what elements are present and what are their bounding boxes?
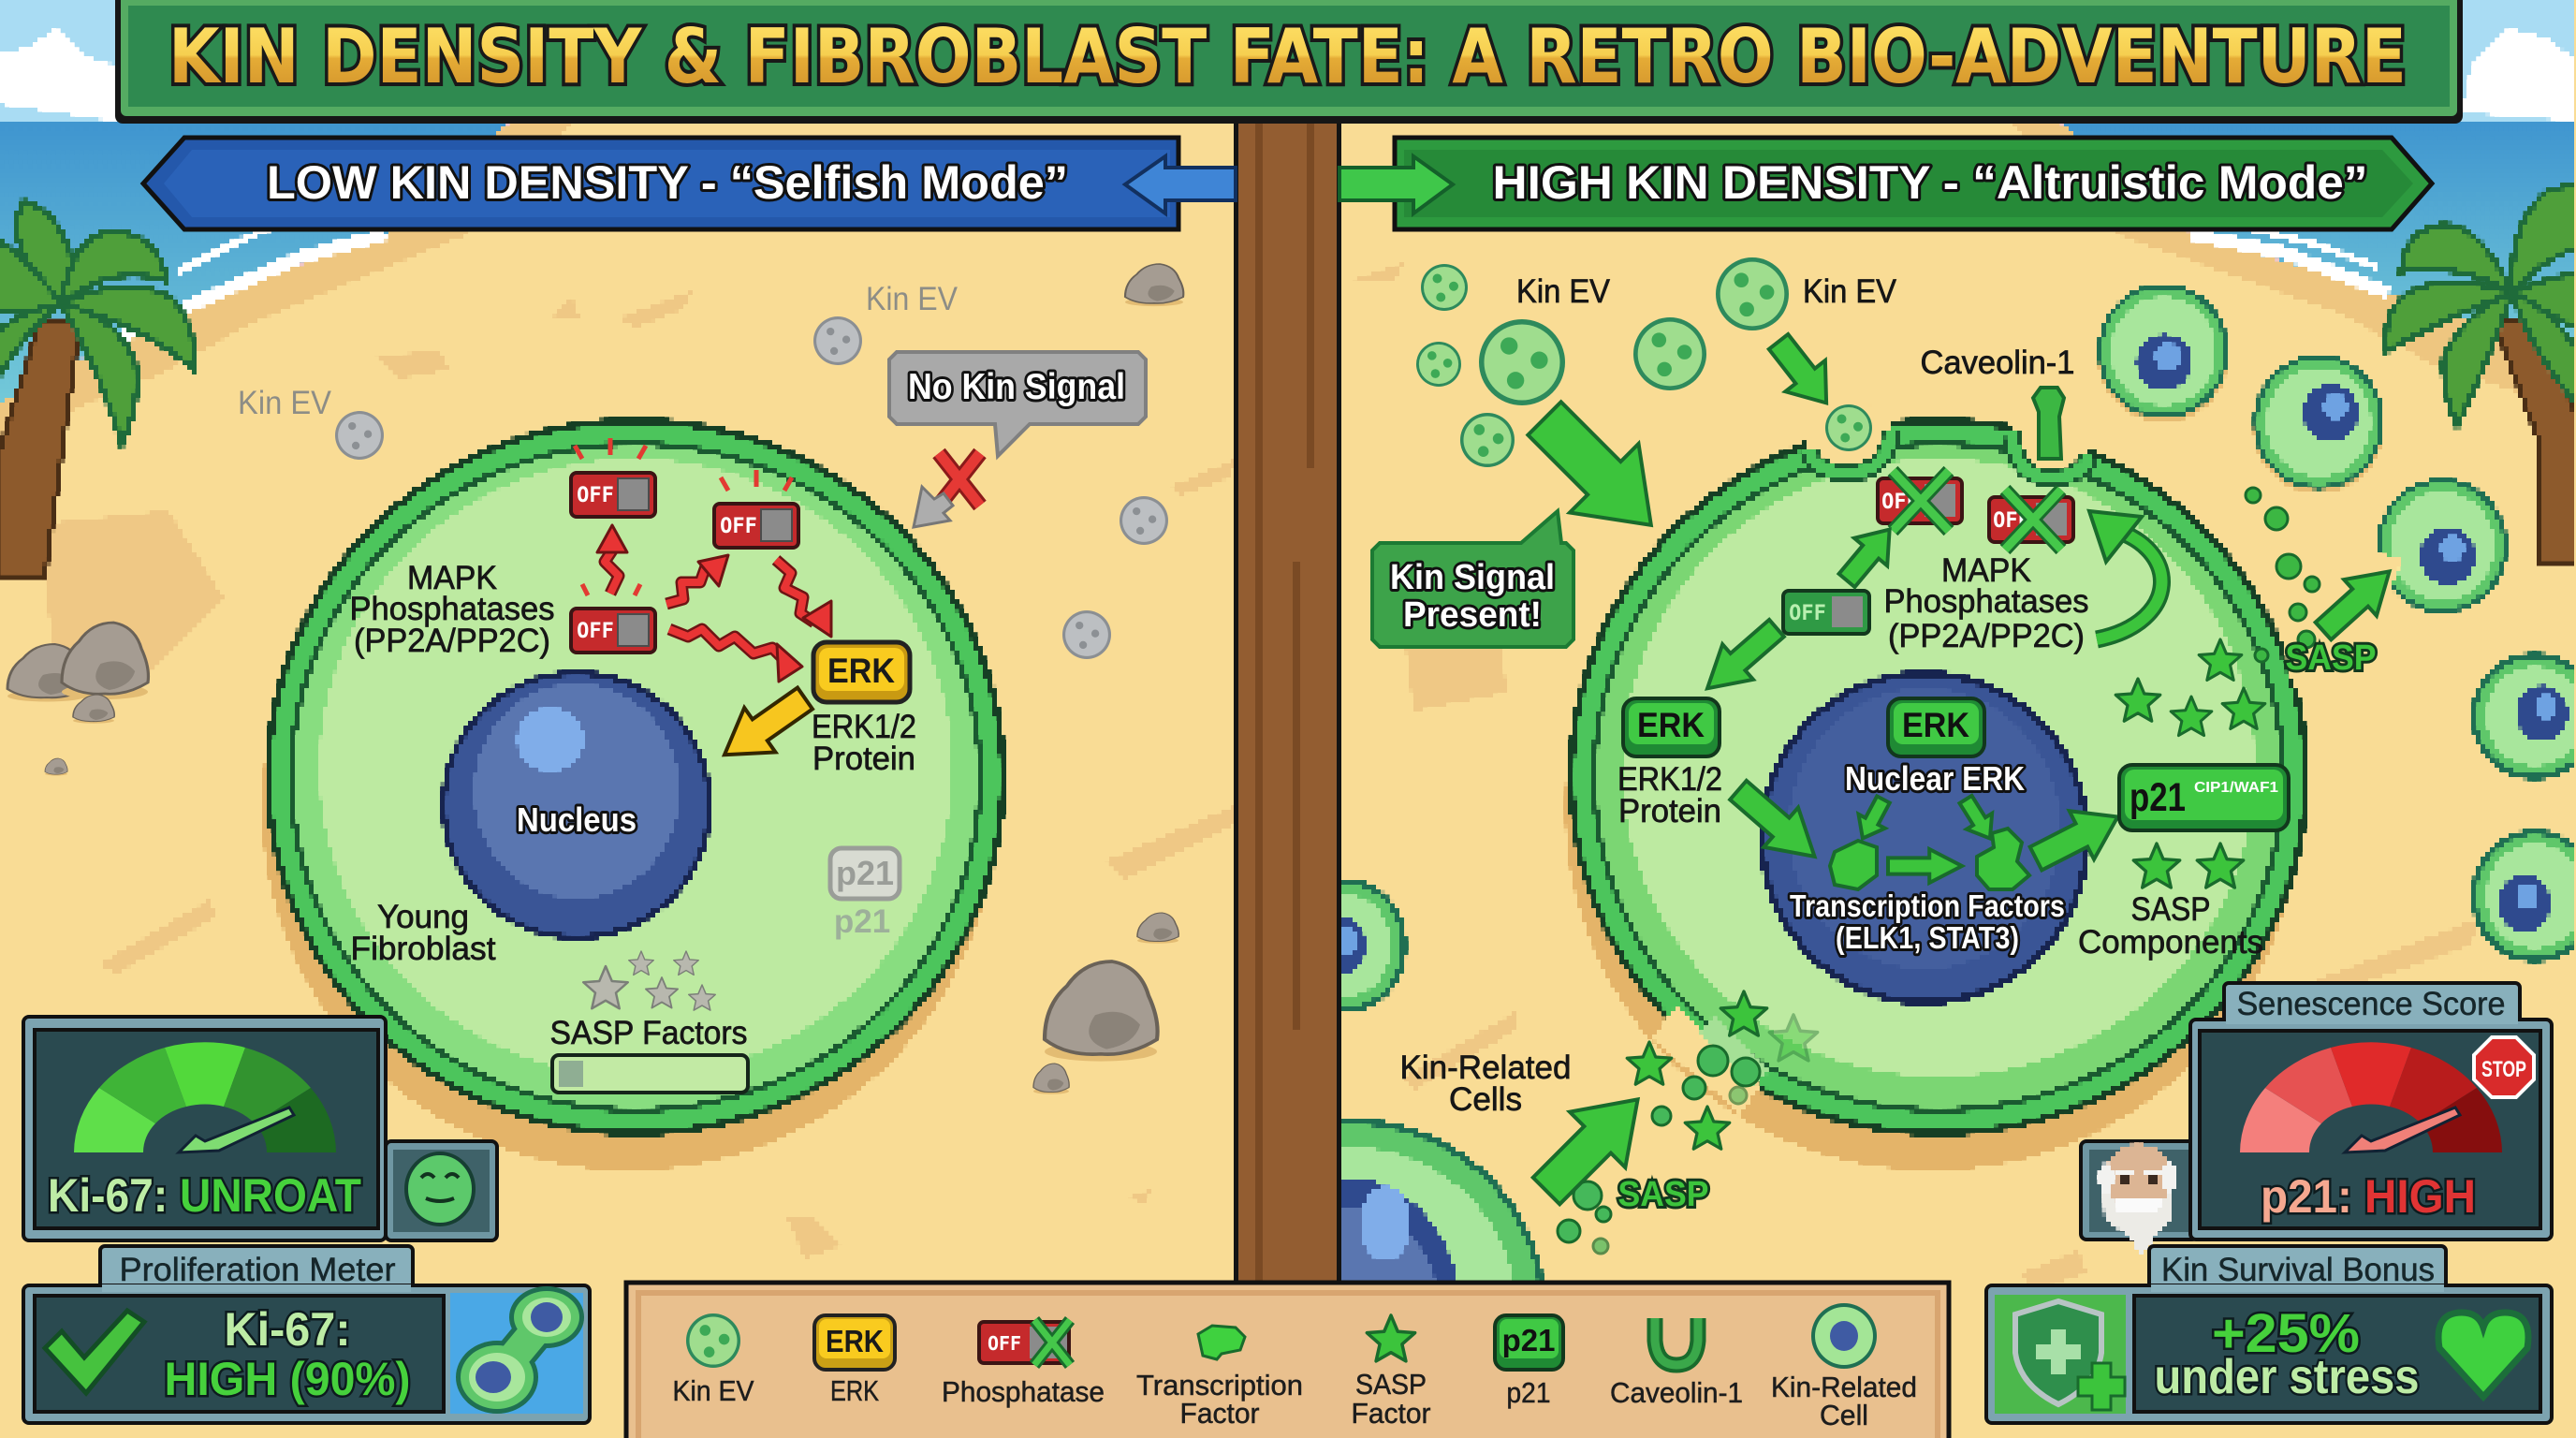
nucleus (441, 670, 712, 940)
gauge: red arc (2240, 1042, 2502, 1152)
legend: ERK: ERK (830, 1374, 879, 1407)
legend: caveolin-1: Caveolin-1 (1610, 1376, 1743, 1409)
faded p21 marker (830, 848, 900, 940)
label: transcription factors: (ELK1, STAT3) (1836, 920, 2019, 955)
faded p21 marker: p21 (836, 854, 894, 892)
label: MAPK phosphatases: (PP2A/PP2C) (354, 623, 550, 659)
title banner (115, 0, 2463, 124)
readout: p21: HIGH (2261, 1170, 2476, 1223)
SASP particles: lower left (1518, 991, 1818, 1254)
icon: heart (2438, 1313, 2528, 1397)
callout: no kin signal: No Kin Signal (908, 367, 1125, 407)
label: faded Kin EV (left): Kin EV (238, 385, 332, 421)
legend: phosphatase: OFF (988, 1332, 1021, 1355)
readout: +25% (2212, 1303, 2360, 1364)
arrow: pointing left from trunk (1125, 156, 1236, 213)
tab label: Kin Survival Bonus (2161, 1252, 2435, 1288)
label: SASP components (2078, 891, 2263, 961)
transcription factor blob: active (1977, 829, 2029, 889)
icon: plus (2078, 1363, 2125, 1410)
label: caveolin-1: Caveolin-1 (1921, 345, 2074, 381)
transcription factor blob: inactive (1830, 841, 1877, 889)
icon: red X core (939, 453, 980, 506)
caveolin-1 receptor (2033, 388, 2064, 459)
legend: kin-related cell: Kin-Related (1771, 1371, 1917, 1403)
ERK protein badge: ERK (827, 652, 895, 690)
faded SASP stars (583, 951, 715, 1010)
tab label: Senescence Score (2237, 986, 2505, 1022)
label: MAPK phosphatases: MAPK (407, 560, 497, 596)
legend: phosphatase: Phosphatase (942, 1375, 1105, 1408)
panel: young fibroblast cell (262, 418, 1006, 1170)
switch: off right: OFF (720, 515, 757, 538)
arrow: switch to ERK (1692, 610, 1792, 706)
label: kin-related cells: Kin-Related (1400, 1049, 1571, 1086)
callout: kin signal present: Kin Signal (1390, 558, 1555, 597)
label: MAPK phosphatases: MAPK (1941, 552, 2031, 589)
ERK badge: nuclear: ERK (1902, 706, 1969, 744)
ERK badge: cytoplasm (1623, 698, 1720, 756)
arrow: nuclear ERK right (1953, 792, 2003, 846)
tab label: Proliferation Meter (120, 1252, 396, 1288)
label: nuclear ERK: Nuclear ERK (1845, 759, 2025, 798)
SASP stars inside cell (2115, 639, 2265, 888)
label: ERK1/2 protein: ERK1/2 (812, 709, 916, 745)
switch: off top (571, 438, 655, 517)
palm tree: right (2386, 178, 2576, 562)
neighbouring kin-related cells (1341, 286, 2574, 1281)
legend: Kin EV (672, 1313, 754, 1407)
arrow: to p21 (2024, 793, 2130, 883)
icon: old cell face (2099, 1144, 2177, 1255)
label: ERK1/2 protein: Protein (1618, 793, 1721, 829)
label: Kin EV (right): Kin EV (1803, 273, 1897, 310)
legend: p21: p21 (1507, 1376, 1550, 1409)
arrow: ERK into nucleus (1721, 770, 1832, 876)
gauge readout: Ki-67: UNROAT (48, 1169, 361, 1222)
legend: kin-related cell: Cell (1820, 1399, 1868, 1431)
label: MAPK phosphatases: Phosphatases (1883, 583, 2089, 620)
label: transcription factors: Transcription Factors (1790, 888, 2065, 923)
switch: green off state (1783, 591, 1869, 634)
legend: p21 (1495, 1315, 1563, 1409)
label: ERK1/2 protein (812, 709, 916, 777)
icon: shield (2015, 1301, 2101, 1404)
label: young fibroblast: Fibroblast (350, 931, 496, 967)
arrow: curved loop to phosphatase (2089, 511, 2162, 639)
label: young fibroblast: Young (377, 899, 469, 935)
switch: green off state: OFF (1789, 602, 1826, 625)
banner text: HIGH KIN DENSITY - “Altruistic Mode” (1492, 156, 2368, 209)
label: faded Kin EV (upper): Kin EV (866, 281, 959, 317)
label: SASP factors: SASP Factors (550, 1015, 747, 1051)
icon: stop sign: STOP (2481, 1057, 2526, 1082)
legend: SASP factor: Factor (1352, 1397, 1430, 1430)
label: MAPK phosphatases: Phosphatases (350, 591, 554, 627)
central tree trunk divider (1234, 117, 1341, 1287)
banner: low kin density (143, 138, 1236, 229)
legend: ERK: ERK (826, 1324, 884, 1358)
label: ERK1/2 protein (1617, 761, 1722, 829)
legend: p21: p21 (1502, 1323, 1555, 1357)
legend: ERK (814, 1315, 895, 1407)
callout: kin signal present: Present! (1403, 595, 1542, 635)
arrow: activation (1888, 849, 1962, 883)
arrow: gray blocked signal (914, 487, 953, 527)
readout value: HIGH (90%) (165, 1353, 410, 1405)
palm tree: left (0, 201, 195, 576)
arrow: SASP to kin cells (1518, 1072, 1665, 1219)
callout: no kin signal (889, 352, 1146, 456)
panel: Ki-67 gauge (23, 1017, 497, 1240)
switch: off lower: OFF (577, 620, 614, 643)
wiggly red arrows between phosphatases and ERK (597, 525, 831, 682)
icon: red X blocking signal (939, 453, 980, 506)
label: SASP components: SASP (2130, 891, 2211, 928)
arrow: SASP to neighbour (2307, 553, 2406, 649)
label: SASP components: Components (2078, 924, 2263, 961)
arrow: pointing right from trunk (1339, 156, 1453, 213)
arrow: big signal into cell (1510, 384, 1686, 560)
label: MAPK phosphatases (350, 560, 554, 659)
arrow: EV into caveola (1759, 326, 1846, 418)
p21 CIP1/WAF1 badge (2119, 765, 2289, 830)
label: MAPK phosphatases (1883, 552, 2089, 654)
icon: stop sign (2474, 1037, 2534, 1097)
panel: proliferation meter (23, 1246, 590, 1423)
banner: high kin density (1339, 138, 2432, 229)
nucleus (1759, 670, 2090, 1005)
icon: dividing cells (456, 1286, 584, 1414)
legend: kin-related cell (1771, 1303, 1917, 1431)
legend: phosphatase (942, 1320, 1105, 1408)
label: MAPK phosphatases: (PP2A/PP2C) (1888, 618, 2085, 654)
p21 CIP1/WAF1 badge: CIP1/WAF1 (2194, 780, 2278, 796)
arrow: yellow ERK to nucleus (709, 676, 821, 777)
SASP particles: right side (2246, 488, 2406, 678)
icon: happy cell (406, 1153, 474, 1225)
label: transcription factors (1790, 888, 2065, 955)
panel: kin survival bonus (1986, 1246, 2552, 1423)
label: SASP: SASP (1617, 1175, 1709, 1214)
switch: off right (714, 470, 798, 548)
switch: disabled top-left phosphatase (1878, 471, 1962, 531)
readout caption: under stress (2155, 1350, 2419, 1404)
label: kin-related cells: Cells (1449, 1081, 1522, 1118)
rocks and gray kin EV markers on the low-density side (7, 264, 1183, 1094)
label: Kin EV (left): Kin EV (1516, 273, 1611, 310)
icon: check mark (45, 1311, 144, 1393)
arrow: nuclear ERK left (1850, 792, 1896, 845)
switch: disabled top-left phosphatase: OFF (1881, 491, 1919, 514)
legend: transcription factor (1136, 1326, 1303, 1430)
label: young fibroblast (350, 899, 496, 967)
label: kin-related cells (1400, 1049, 1571, 1118)
arrow: switch to phosphatase (1830, 516, 1906, 594)
legend: SASP factor (1352, 1315, 1430, 1430)
switch: disabled top-right phosphatase (1989, 490, 2073, 550)
ERK badge: cytoplasm: ERK (1637, 706, 1705, 744)
panel: kin-connected fibroblast cell (1565, 403, 2331, 1170)
label: ERK1/2 protein: ERK1/2 (1617, 761, 1722, 798)
label: ERK1/2 protein: Protein (812, 741, 915, 777)
ERK badge: nuclear (1888, 698, 1984, 756)
gauge: green arc (74, 1042, 336, 1152)
nucleus label: Nucleus (517, 800, 637, 839)
readout: Ki-67: (225, 1303, 350, 1356)
p21 CIP1/WAF1 badge: p21 (2130, 775, 2186, 820)
legend: transcription factor: Transcription (1136, 1369, 1303, 1401)
green kin EVs (1416, 257, 1872, 467)
panel: senescence score (2081, 983, 2552, 1255)
ERK protein badge (813, 642, 910, 702)
switch: disabled top-right phosphatase: OFF (1993, 509, 2030, 533)
banner text: LOW KIN DENSITY - “Selfish Mode” (267, 156, 1068, 209)
switch: off lower (571, 584, 655, 653)
legend: transcription factor: Factor (1179, 1397, 1260, 1430)
SASP factors level bar (552, 1055, 748, 1093)
legend: Kin EV: Kin EV (672, 1374, 754, 1407)
legend panel (626, 1283, 1949, 1438)
switch: off top: OFF (577, 484, 614, 507)
callout: kin signal present (1372, 511, 1573, 647)
legend: SASP factor: SASP (1355, 1368, 1427, 1401)
label: SASP: SASP (2286, 638, 2376, 678)
faded p21 marker: p21 (834, 903, 890, 940)
legend: caveolin-1 (1610, 1318, 1743, 1409)
